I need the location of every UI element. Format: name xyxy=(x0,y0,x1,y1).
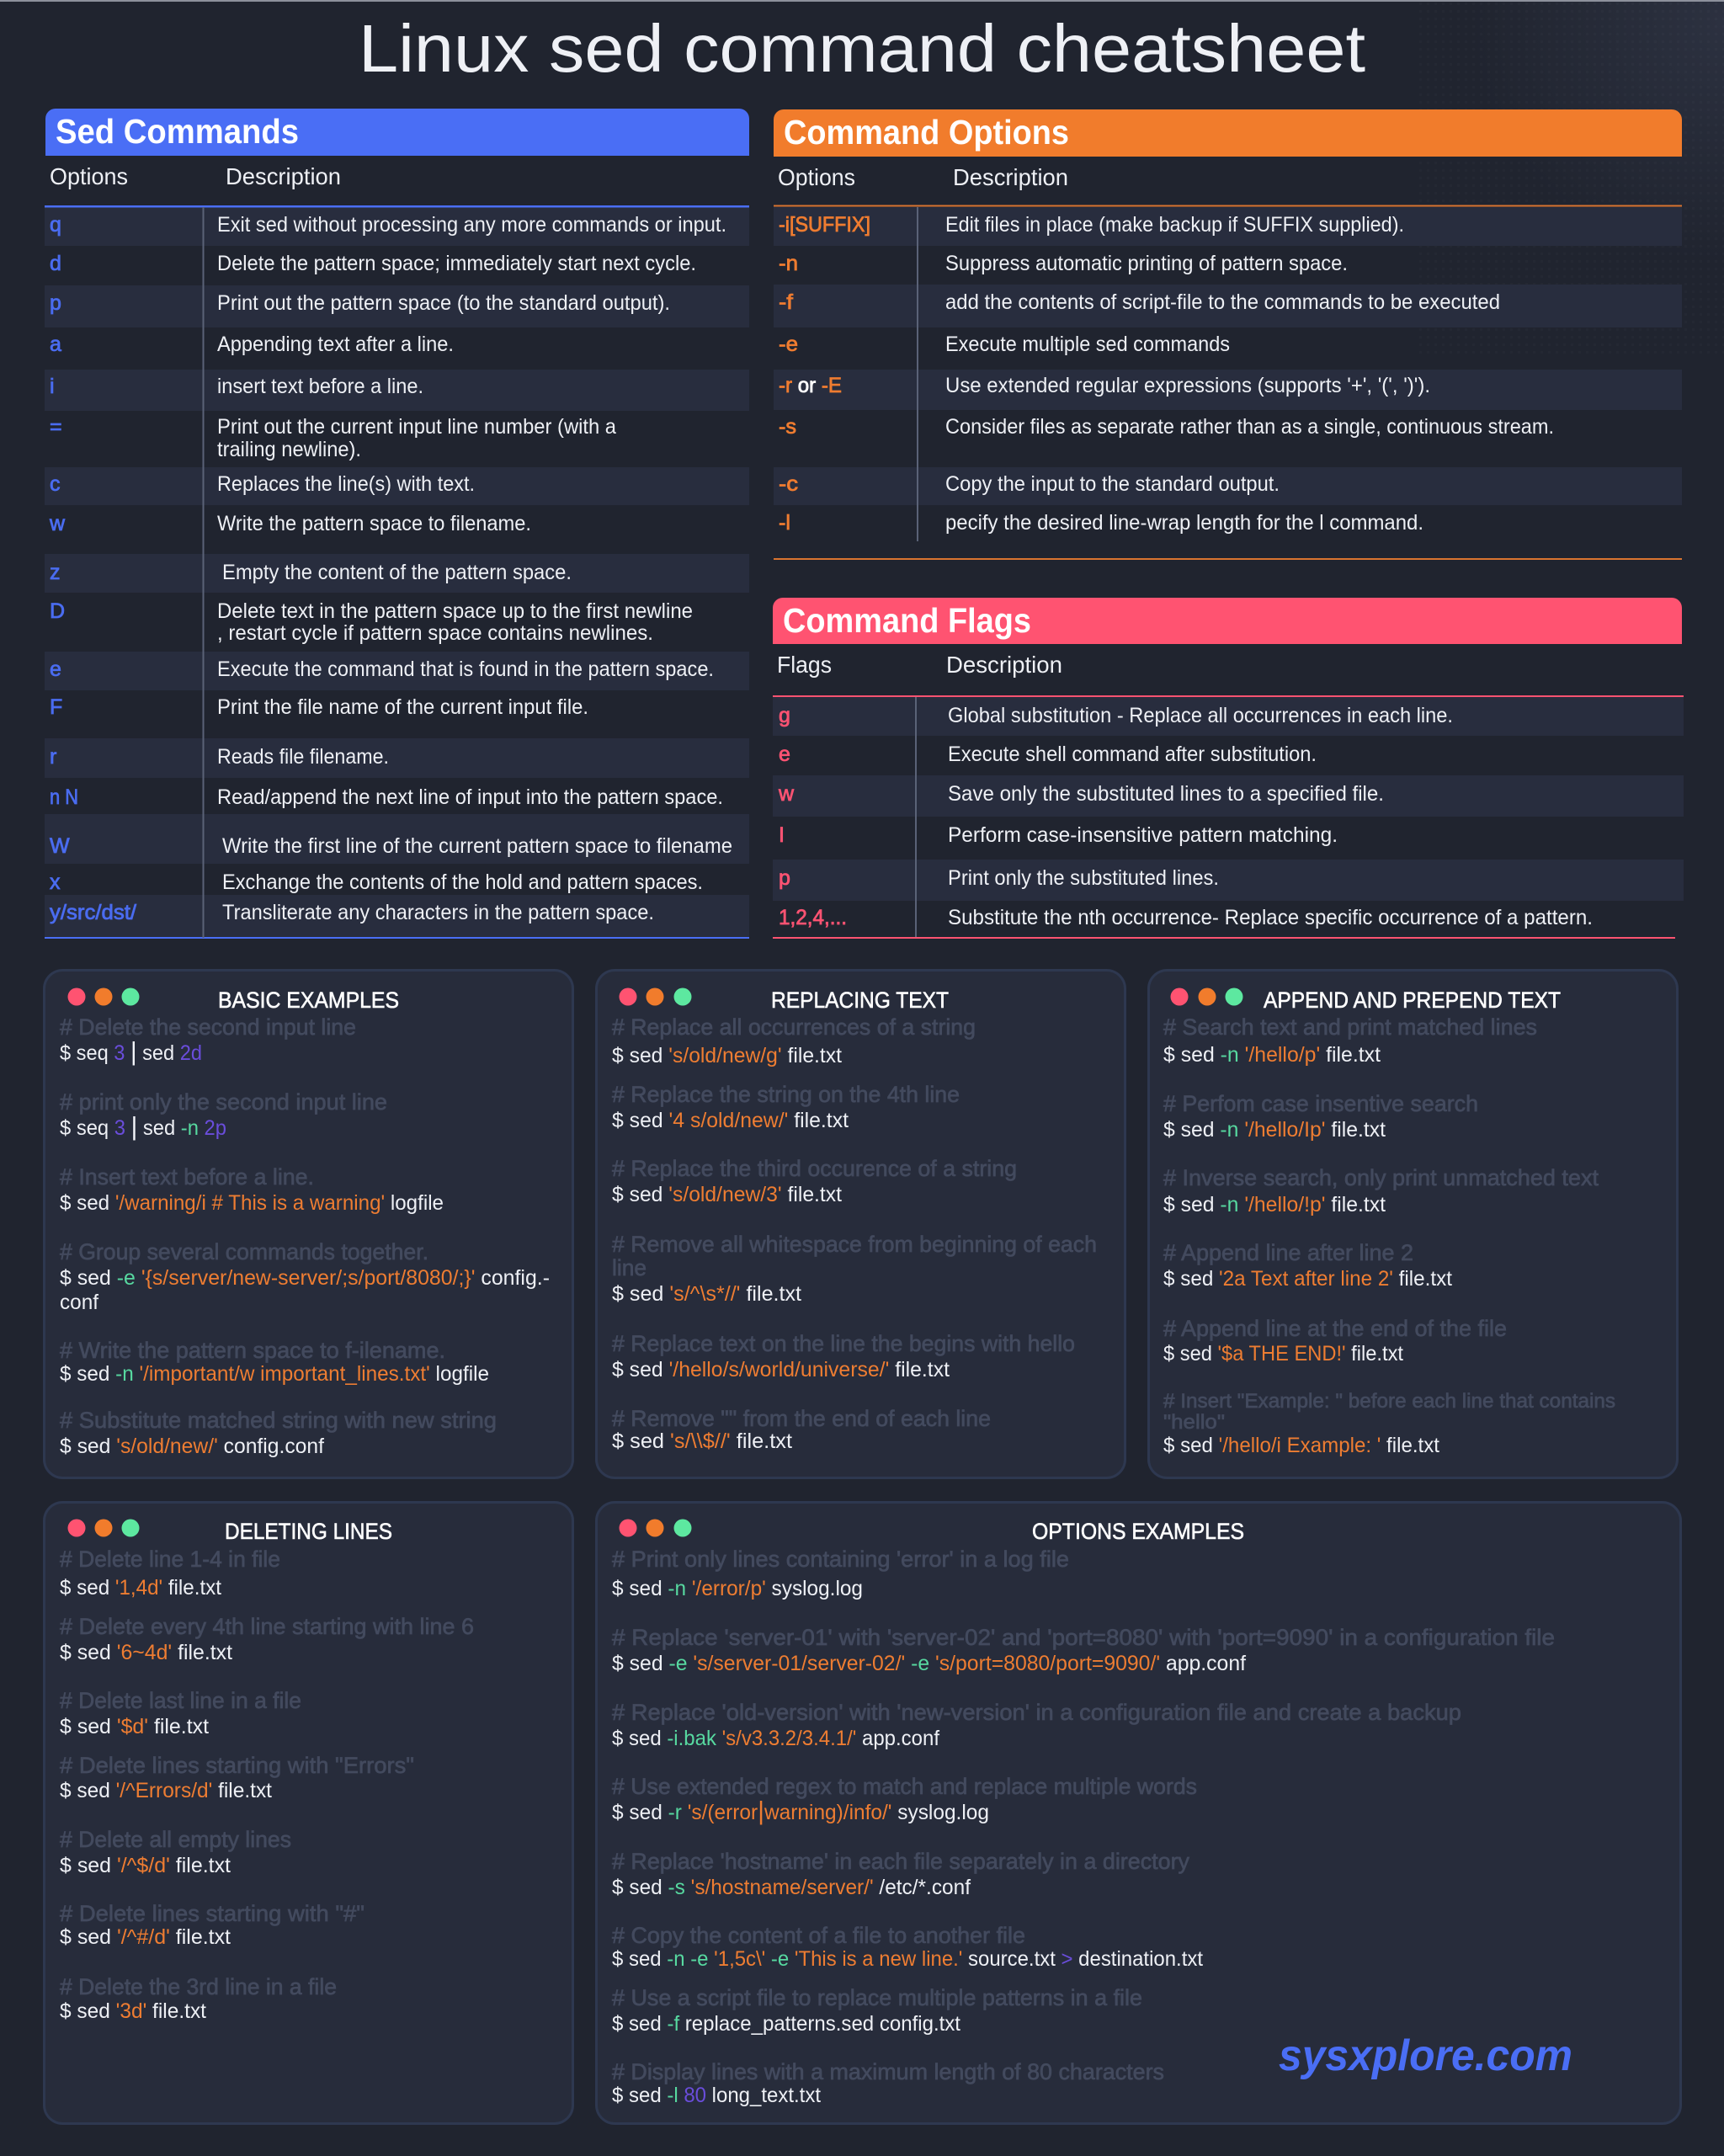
example: print second line: # print only the second input line xyxy=(60,1089,387,1115)
row a xyxy=(50,333,454,356)
heading: command options xyxy=(774,109,1682,157)
row w: w xyxy=(778,782,795,806)
example: remove quotes xyxy=(612,1406,991,1453)
example: remove whitespace xyxy=(612,1232,1097,1306)
row capital D xyxy=(50,599,693,645)
example: print error lines: # Print only lines containing 'error' in a log file xyxy=(612,1546,1069,1572)
example: extended regex: $ sed -r 's/(error|warning)/info/' syslog.log xyxy=(612,1796,989,1825)
example: delete 3rd line xyxy=(60,1974,337,2023)
row equals: trailing newline). xyxy=(217,438,361,461)
example: group commands: # Group several commands together. xyxy=(60,1239,428,1264)
row c: Copy the input to the standard output. xyxy=(945,472,1280,496)
example: script file: $ sed -f replace_patterns.sed config.txt xyxy=(612,2012,960,2036)
example: replace version with backup: $ sed -i.bak 's/v3.3.2/3.4.1/' app.conf xyxy=(612,1727,939,1750)
column headers: Description xyxy=(226,163,341,189)
row f: add the contents of script-file to the commands to be executed xyxy=(945,290,1500,314)
heading: command flags xyxy=(773,598,1682,644)
panel: basic examples xyxy=(44,970,572,1478)
example: insert before hello: $ sed '/hello/i Example: ' file.txt xyxy=(1163,1434,1439,1457)
row I xyxy=(779,823,1338,847)
row a: Appending text after a line. xyxy=(217,333,454,356)
example: insert before hello: "hello" xyxy=(1163,1411,1225,1434)
example: substitute string: # Substitute matched string with new string xyxy=(60,1408,497,1433)
row e: Execute the command that is found in the pattern space. xyxy=(217,657,714,681)
panel: sed commands table xyxy=(45,109,749,939)
row e xyxy=(779,333,1230,356)
window dots xyxy=(67,1519,140,1537)
example: replace on 4th line: $ sed '4 s/old/new/' file.txt xyxy=(612,1109,849,1132)
row e xyxy=(779,743,1317,766)
row g: Global substitution - Replace all occurrences in each line. xyxy=(948,704,1453,727)
example: delete line range xyxy=(60,1546,280,1600)
row capital F: F xyxy=(50,695,62,719)
row c: -c xyxy=(779,472,798,496)
example: replace all: $ sed 's/old/new/g' file.txt xyxy=(612,1044,842,1067)
column headers: Description xyxy=(946,652,1062,678)
example: group commands: $ sed -e '{s/server/new-server/;s/port/8080/;}' config.- xyxy=(60,1266,550,1290)
panel title: APPEND AND PREPEND TEXT xyxy=(1264,988,1561,1013)
row capital W: W xyxy=(50,834,70,858)
row capital W: Write the first line of the current pattern space to filename xyxy=(222,834,732,858)
row capital D: D xyxy=(50,599,65,623)
row c xyxy=(779,472,1280,496)
row n: -n xyxy=(779,252,798,275)
panel title: BASIC EXAMPLES xyxy=(218,988,399,1013)
row nth occurrence: 1,2,4,... xyxy=(779,906,847,929)
example: replace version with backup: # Replace 'old-version' with 'new-version' in a configuration file and create a backup xyxy=(612,1700,1461,1725)
example: substitute string xyxy=(60,1408,497,1458)
example: remove whitespace: line xyxy=(612,1255,646,1280)
column headers: Options xyxy=(50,163,128,189)
example: remove whitespace: # Remove all whitespace from beginning of each xyxy=(612,1232,1097,1257)
example: extended regex: # Use extended regex to match and replace multiple words xyxy=(612,1774,1197,1799)
column headers: Flags xyxy=(777,652,832,678)
panel: replacing text xyxy=(596,970,1125,1478)
example: remove quotes: $ sed 's/\\$//' file.txt xyxy=(612,1429,792,1453)
row y/src/dst xyxy=(50,901,654,924)
row z: z xyxy=(50,561,61,584)
example: search text: $ sed -n '/hello/p' file.txt xyxy=(1163,1043,1381,1067)
row i suffix xyxy=(779,213,1404,237)
row bands xyxy=(45,205,749,939)
row p: p xyxy=(50,291,61,315)
row I: Perform case-insensitive pattern matching. xyxy=(948,823,1338,847)
row f: -f xyxy=(779,290,793,314)
row c xyxy=(50,472,475,496)
row n xyxy=(779,252,1348,275)
example: replace server and port: # Replace 'server-01' with 'server-02' and 'port=8080' with 'port=9090' in a configuration file xyxy=(612,1625,1555,1650)
panel: command options table xyxy=(774,109,1682,560)
example: case insensitive: $ sed -n '/hello/Ip' file.txt xyxy=(1163,1118,1386,1142)
column headers xyxy=(777,652,1062,678)
window dots xyxy=(620,988,692,1005)
row g: g xyxy=(779,704,790,727)
row i: i xyxy=(50,375,55,398)
example: delete empty lines: # Delete all empty lines xyxy=(60,1827,291,1852)
example: write pattern space: # Write the pattern space to f-ilename. xyxy=(60,1338,445,1363)
row e: Execute shell command after substitution. xyxy=(948,743,1317,766)
row a: a xyxy=(50,333,61,356)
example: inverse search: # Inverse search, only print unmatched text xyxy=(1163,1165,1599,1190)
example: separate files xyxy=(612,1849,1189,1899)
window dots xyxy=(67,988,140,1005)
example: print second line xyxy=(60,1089,387,1141)
row p: Print only the substituted lines. xyxy=(948,866,1219,890)
example: inverse search: $ sed -n '/hello/!p' file.txt xyxy=(1163,1193,1386,1216)
example: copy file content: $ sed -n -e '1,5c\' -e 'This is a new line.' source.txt > destination.txt xyxy=(612,1947,1203,1971)
row p xyxy=(779,866,1219,890)
heading: command options: Command Options xyxy=(784,113,1069,152)
example: insert text: $ sed '/warning/i # This is a warning' logfile xyxy=(60,1191,444,1215)
row s: Consider files as separate rather than as a single, continuous stream. xyxy=(945,415,1554,439)
example: separate files: $ sed -s 's/hostname/server/' /etc/*.conf xyxy=(612,1876,971,1899)
example: write pattern space: $ sed -n '/important/w important_lines.txt' logfile xyxy=(60,1362,489,1386)
row e: e xyxy=(779,743,790,766)
example: third occurrence: $ sed 's/old/new/3' file.txt xyxy=(612,1183,842,1206)
example: delete 3rd line: $ sed '3d' file.txt xyxy=(60,1999,206,2023)
panel title: DELETING LINES xyxy=(225,1519,392,1544)
example: append after line 2: # Append line after line 2 xyxy=(1163,1240,1413,1265)
example: copy file content: # Copy the content of a file to another file xyxy=(612,1923,1025,1948)
example: delete last line: $ sed '$d' file.txt xyxy=(60,1715,209,1738)
example: search text xyxy=(1163,1014,1537,1067)
row equals xyxy=(50,415,616,461)
column headers: Description xyxy=(953,164,1068,190)
row equals: Print out the current input line number (with a xyxy=(217,415,616,439)
row r: Reads file filename. xyxy=(217,745,389,769)
row e: e xyxy=(50,657,61,681)
window dots xyxy=(620,1519,692,1537)
example: delete comment lines: $ sed '/^#/d' file.txt xyxy=(60,1925,231,1949)
example: replace all: # Replace all occurrences of a string xyxy=(612,1014,976,1040)
column headers xyxy=(50,163,341,189)
row bands xyxy=(774,205,1682,560)
example: delete lines starting with errors xyxy=(60,1753,414,1802)
example: delete every 4th line: # Delete every 4th line starting with line 6 xyxy=(60,1614,474,1639)
example: inverse search xyxy=(1163,1165,1599,1216)
example: group commands xyxy=(60,1239,550,1314)
row equals: = xyxy=(50,415,62,439)
row q: q xyxy=(50,213,61,237)
heading: sed commands: Sed Commands xyxy=(56,112,299,151)
example: delete lines starting with errors: # Delete lines starting with "Errors" xyxy=(60,1753,414,1778)
example: append after line 2: $ sed '2a Text after line 2' file.txt xyxy=(1163,1267,1452,1291)
row i suffix: -i[SUFFIX] xyxy=(779,213,870,237)
example: append at end: # Append line at the end of the file xyxy=(1163,1316,1507,1341)
example: delete last line: # Delete last line in a file xyxy=(60,1688,301,1713)
panel title: OPTIONS EXAMPLES xyxy=(1032,1519,1244,1544)
example: replace server and port xyxy=(612,1625,1555,1675)
row capital F: Print the file name of the current input file. xyxy=(217,695,588,719)
row z: Empty the content of the pattern space. xyxy=(222,561,572,584)
row w xyxy=(49,512,531,535)
row capital F xyxy=(50,695,588,719)
example: delete every 4th line: $ sed '6~4d' file.txt xyxy=(60,1641,232,1664)
example: replace text on hello line: # Replace text on the line the begins with hello xyxy=(612,1331,1075,1356)
example: replace version with backup xyxy=(612,1700,1461,1750)
example: delete line range: $ sed '1,4d' file.txt xyxy=(60,1576,221,1600)
row e: Execute multiple sed commands xyxy=(945,333,1230,356)
row l: pecify the desired line-wrap length for the l command. xyxy=(945,511,1423,535)
example: delete lines starting with errors: $ sed '/^Errors/d' file.txt xyxy=(60,1779,272,1802)
row y/src/dst: Transliterate any characters in the pattern space. xyxy=(222,901,654,924)
title: Linux sed command cheatsheet xyxy=(359,11,1365,86)
row x: x xyxy=(50,870,61,894)
example: delete second line: $ seq 3 | sed 2d xyxy=(60,1036,202,1066)
example: append at end xyxy=(1163,1316,1507,1365)
example: insert before hello: # Insert "Example: " before each line that contains xyxy=(1163,1390,1615,1413)
example: write pattern space xyxy=(60,1338,489,1386)
example: replace text on hello line: $ sed '/hello/s/world/universe/' file.txt xyxy=(612,1358,950,1381)
example: delete second line: # Delete the second input line xyxy=(60,1014,356,1040)
panel: append and prepend text xyxy=(1148,970,1677,1478)
example: case insensitive: # Perfom case insentive search xyxy=(1163,1091,1478,1116)
row y/src/dst: y/src/dst/ xyxy=(50,901,136,924)
column headers xyxy=(778,164,1068,190)
row r or E: Use extended regular expressions (supports '+', '(', ')'). xyxy=(945,374,1430,397)
example: remove quotes: # Remove "" from the end of each line xyxy=(612,1406,991,1431)
example: line length: # Display lines with a maximum length of 80 characters xyxy=(612,2059,1164,2084)
example: delete line range: # Delete line 1-4 in file xyxy=(60,1546,280,1572)
example: replace text on hello line xyxy=(612,1331,1075,1381)
row p: p xyxy=(779,866,790,890)
row p: Print out the pattern space (to the standard output). xyxy=(217,291,670,315)
example: extended regex xyxy=(612,1774,1197,1825)
example: delete comment lines xyxy=(60,1901,364,1949)
row nth occurrence: Substitute the nth occurrence- Replace specific occurrence of a pattern. xyxy=(948,906,1593,929)
row r: r xyxy=(50,745,56,769)
example: print second line: $ seq 3 | sed -n 2p xyxy=(60,1111,226,1141)
example: delete empty lines xyxy=(60,1827,291,1877)
row d: Delete the pattern space; immediately start next cycle. xyxy=(217,252,696,275)
row n: Suppress automatic printing of pattern space. xyxy=(945,252,1348,275)
example: print error lines xyxy=(612,1546,1069,1600)
example: replace all xyxy=(612,1014,976,1067)
column headers: Options xyxy=(778,164,855,190)
row bands xyxy=(773,695,1684,939)
example: replace server and port: $ sed -e 's/server-01/server-02/' -e 's/port=8080/port=9090/' app.conf xyxy=(612,1652,1246,1675)
row l: -l xyxy=(779,511,790,535)
example: delete last line xyxy=(60,1688,301,1738)
example: insert text: # Insert text before a line. xyxy=(60,1164,314,1190)
example: replace on 4th line: # Replace the string on the 4th line xyxy=(612,1082,960,1107)
row z xyxy=(50,561,572,584)
example: replace on 4th line xyxy=(612,1082,960,1132)
row e: -e xyxy=(779,333,798,356)
row s: -s xyxy=(779,415,796,439)
example: third occurrence: # Replace the third occurence of a string xyxy=(612,1156,1017,1181)
example: case insensitive xyxy=(1163,1091,1478,1142)
example: script file xyxy=(612,1985,1142,2036)
row r xyxy=(50,745,389,769)
row i suffix: Edit files in place (make backup if SUFFIX supplied). xyxy=(945,213,1404,237)
row x: Exchange the contents of the hold and pattern spaces. xyxy=(222,870,703,894)
heading: sed commands xyxy=(45,109,749,156)
panel: command flags table xyxy=(773,598,1684,939)
panel title: REPLACING TEXT xyxy=(771,988,949,1013)
row c: c xyxy=(50,472,61,496)
example: append after line 2 xyxy=(1163,1240,1452,1291)
example: delete 3rd line: # Delete the 3rd line in a file xyxy=(60,1974,337,1999)
row n N: Read/append the next line of input into the pattern space. xyxy=(217,785,723,809)
row w: w xyxy=(49,512,66,535)
row i xyxy=(50,375,423,398)
example: append at end: $ sed '$a THE END!' file.txt xyxy=(1163,1342,1403,1365)
row n N: n N xyxy=(50,785,78,809)
watermark: sysxplore.com: sysxplore.com xyxy=(1279,2031,1572,2080)
row capital D: , restart cycle if pattern space contains newlines. xyxy=(217,621,653,645)
example: delete every 4th line xyxy=(60,1614,474,1664)
window dots xyxy=(1170,988,1242,1005)
row w: Write the pattern space to filename. xyxy=(217,512,531,535)
example: delete empty lines: $ sed '/^$/d' file.txt xyxy=(60,1854,231,1877)
example: separate files: # Replace 'hostname' in each file separately in a directory xyxy=(612,1849,1189,1874)
example: insert text xyxy=(60,1164,444,1215)
row capital D: Delete text in the pattern space up to the first newline xyxy=(217,599,693,623)
example: remove whitespace: $ sed 's/^\s*//' file.txt xyxy=(612,1282,801,1306)
example: delete second line xyxy=(60,1014,356,1066)
panel: deleting lines xyxy=(44,1502,572,2123)
example: line length: $ sed -l 80 long_text.txt xyxy=(612,2084,821,2107)
example: line length xyxy=(612,2059,1164,2107)
example: third occurrence xyxy=(612,1156,1017,1206)
row d: d xyxy=(50,252,61,275)
row q: Exit sed without processing any more commands or input. xyxy=(217,213,726,237)
row i: insert text before a line. xyxy=(217,375,423,398)
panel: options examples xyxy=(596,1502,1680,2123)
example: group commands: conf xyxy=(60,1291,98,1314)
row I: I xyxy=(779,823,785,847)
row w: Save only the substituted lines to a specified file. xyxy=(948,782,1384,806)
row c: Replaces the line(s) with text. xyxy=(217,472,475,496)
row r or E: -r or -E xyxy=(779,374,842,397)
example: copy file content xyxy=(612,1923,1203,1971)
example: search text: # Search text and print matched lines xyxy=(1163,1014,1537,1040)
example: substitute string: $ sed 's/old/new/' config.conf xyxy=(60,1435,324,1458)
example: insert before hello xyxy=(1163,1390,1615,1457)
example: script file: # Use a script file to replace multiple patterns in a file xyxy=(612,1985,1142,2010)
heading: command flags: Command Flags xyxy=(783,601,1031,640)
example: print error lines: $ sed -n '/error/p' syslog.log xyxy=(612,1577,863,1600)
example: delete comment lines: # Delete lines starting with "#" xyxy=(60,1901,364,1926)
